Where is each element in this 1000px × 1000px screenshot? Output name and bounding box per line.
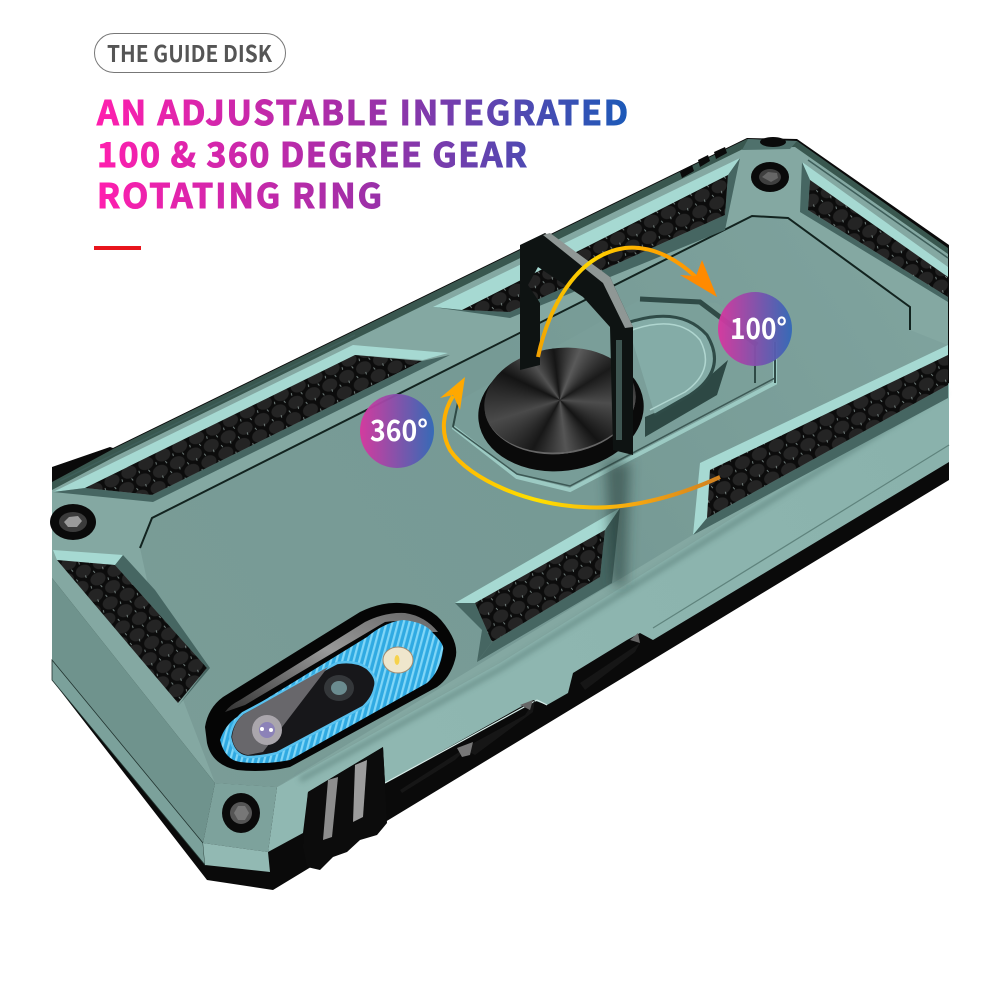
screw top left — [50, 504, 96, 540]
honeycomb grip panels — [57, 175, 948, 703]
side face right — [268, 383, 949, 852]
screw bottom — [222, 793, 260, 833]
heading — [96, 86, 628, 218]
rail slots — [303, 747, 387, 870]
phone case — [50, 137, 949, 890]
ring plate outline — [453, 298, 775, 490]
inner plate — [140, 216, 948, 787]
bottom chamfer — [203, 843, 270, 872]
camera module — [205, 603, 456, 771]
bevel shadows — [53, 158, 948, 706]
spun disc — [480, 345, 640, 465]
ring shadow — [605, 462, 630, 585]
ring recess — [627, 316, 728, 437]
badge: the guide disk: THE GUIDE DISK — [107, 35, 272, 69]
screw top right — [751, 162, 789, 192]
mint trim strips — [53, 158, 948, 603]
top corner facets — [742, 139, 797, 150]
side line right — [653, 445, 949, 628]
ring base — [471, 341, 651, 481]
side face shadow — [300, 392, 945, 780]
heading: 100 & 360 DEGREE GEAR — [97, 128, 527, 177]
arrow: 100 degree — [538, 248, 717, 357]
callout: 100 degrees — [718, 292, 792, 366]
ring handle — [520, 233, 633, 455]
callout: 360 degrees: 360° — [370, 408, 428, 450]
case silhouette — [52, 138, 949, 890]
heading: AN ADJUSTABLE INTEGRATED — [96, 86, 628, 135]
frame — [52, 147, 948, 787]
side face left — [52, 578, 215, 843]
callout: 100 degrees: 100° — [730, 306, 787, 348]
top rim inner dark line — [60, 160, 948, 481]
corner chamfer — [203, 783, 277, 852]
arrow: 360 degree — [440, 377, 720, 508]
side lower strip — [52, 660, 205, 865]
side highlight line — [385, 700, 547, 783]
buttons — [400, 633, 640, 793]
callout: 360 degrees — [360, 394, 434, 468]
red accent rule — [94, 246, 141, 250]
heading: ROTATING RING — [97, 169, 382, 218]
rim bumps — [680, 137, 786, 178]
top rim — [52, 139, 948, 787]
plate seam — [140, 216, 910, 548]
